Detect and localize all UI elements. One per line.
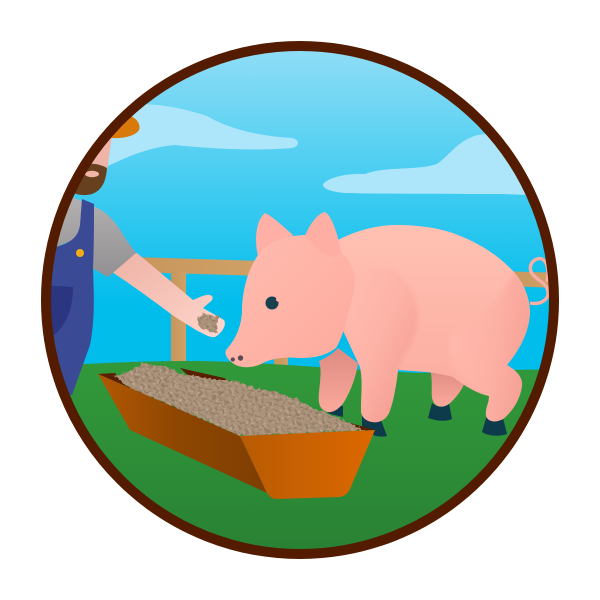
far hind leg — [430, 372, 464, 407]
farmer face — [92, 138, 112, 170]
trough — [98, 363, 375, 499]
farmer beard — [75, 164, 107, 196]
pig body — [338, 225, 530, 422]
sky — [56, 51, 549, 373]
feed pile — [114, 363, 365, 436]
pig soft shading — [348, 267, 532, 425]
shoulder — [348, 288, 417, 422]
far hind hoof — [428, 403, 452, 421]
fence — [142, 257, 549, 365]
trough interior — [98, 368, 375, 436]
circular border — [46, 46, 554, 554]
pig — [225, 212, 548, 437]
far front hoof — [320, 406, 343, 417]
hindquarter — [476, 270, 530, 422]
near hind hoof — [482, 415, 507, 436]
trough front end — [240, 430, 375, 499]
farmer mouth — [85, 171, 99, 177]
illustration: farmer feeding a pig — [41, 41, 559, 559]
feed in hand — [198, 313, 219, 333]
overalls button — [76, 249, 84, 257]
pig tail — [530, 259, 548, 303]
far front leg — [319, 348, 358, 412]
cloud left — [104, 104, 298, 168]
cloud right — [322, 134, 526, 195]
near front hoof — [362, 416, 387, 437]
pig head — [225, 235, 355, 367]
overalls — [52, 199, 94, 395]
grass — [70, 361, 539, 549]
pig nostrils — [231, 355, 243, 362]
trough left side — [98, 374, 267, 493]
pig eye — [266, 296, 278, 310]
farmer — [40, 116, 225, 395]
pig right ear — [305, 212, 340, 250]
overalls pocket — [51, 286, 73, 335]
farmer hat — [111, 116, 140, 138]
farmer arm and hand — [112, 253, 225, 337]
pig left ear — [256, 213, 293, 260]
farmer shirt — [56, 198, 136, 277]
